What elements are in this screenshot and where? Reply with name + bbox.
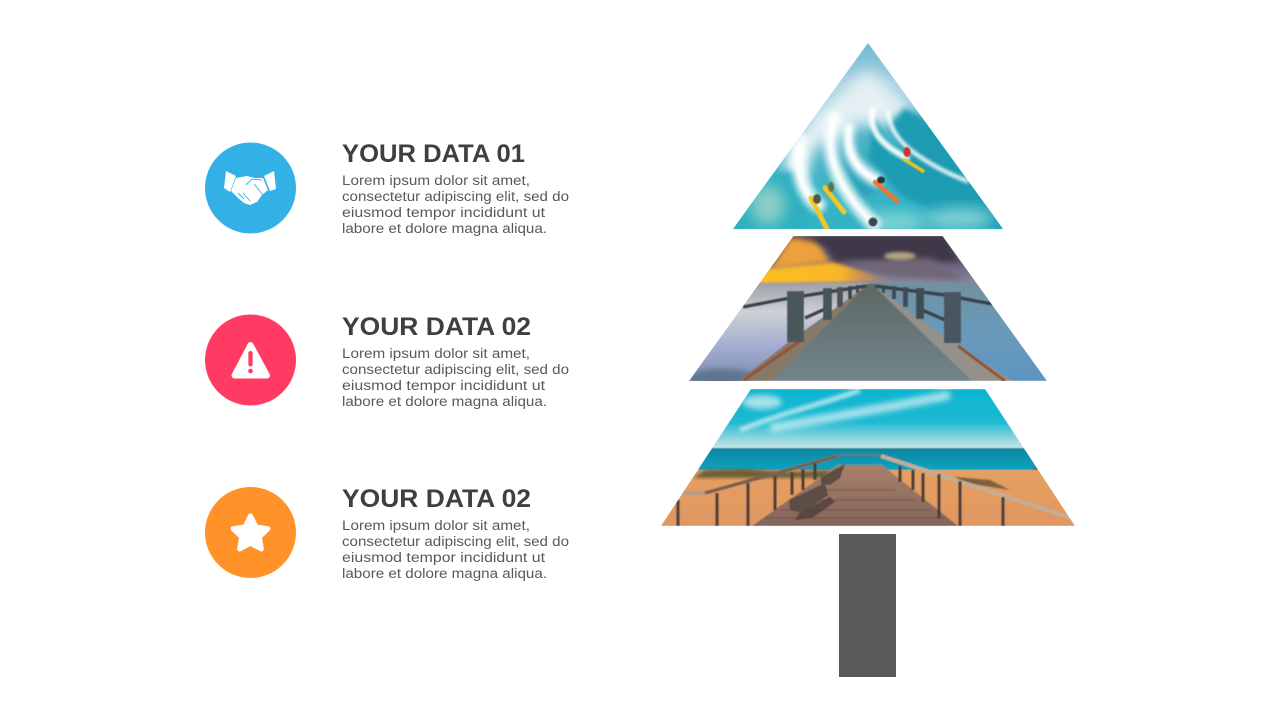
- body text: [342, 173, 569, 236]
- item 1: your data 01: [205, 140, 569, 236]
- tree tier 1: surfers photo triangle: [733, 43, 1003, 232]
- heading: YOUR DATA 02: [342, 485, 531, 513]
- body text: eiusmod tempor incididunt ut: [342, 550, 545, 565]
- body text: consectetur adipiscing elit, sed do: [342, 189, 569, 204]
- body text: labore et dolore magna aliqua.: [342, 221, 547, 236]
- icon: handshake: [205, 142, 296, 234]
- icon: star: [205, 487, 296, 578]
- railings: [678, 455, 1078, 526]
- body text: consectetur adipiscing elit, sed do: [342, 362, 569, 377]
- body text: [342, 518, 569, 581]
- item 2: your data 02: [205, 313, 569, 409]
- tree trunk: [839, 534, 896, 677]
- body text: labore et dolore magna aliqua.: [342, 394, 547, 409]
- benches: [789, 464, 845, 520]
- body text: labore et dolore magna aliqua.: [342, 566, 547, 581]
- body text: Lorem ipsum dolor sit amet,: [342, 346, 530, 361]
- item 3: your data 02: [205, 485, 569, 581]
- tree tier 2: pier at sunset photo trapezoid: [688, 236, 1047, 387]
- body text: Lorem ipsum dolor sit amet,: [342, 518, 530, 533]
- boardwalk deck: [752, 465, 958, 526]
- heading: YOUR DATA 01: [342, 140, 525, 168]
- body text: eiusmod tempor incididunt ut: [342, 378, 545, 393]
- body text: Lorem ipsum dolor sit amet,: [342, 173, 530, 188]
- pier walkway: [772, 284, 972, 381]
- body text: consectetur adipiscing elit, sed do: [342, 534, 569, 549]
- icon: warning: [205, 314, 296, 406]
- body text: [342, 346, 569, 409]
- tree tier 3: boardwalk photo trapezoid: [661, 389, 1078, 526]
- body text: eiusmod tempor incididunt ut: [342, 205, 545, 220]
- heading: YOUR DATA 02: [342, 313, 531, 341]
- pier posts and rails: [743, 285, 992, 343]
- surfboards: [811, 147, 923, 229]
